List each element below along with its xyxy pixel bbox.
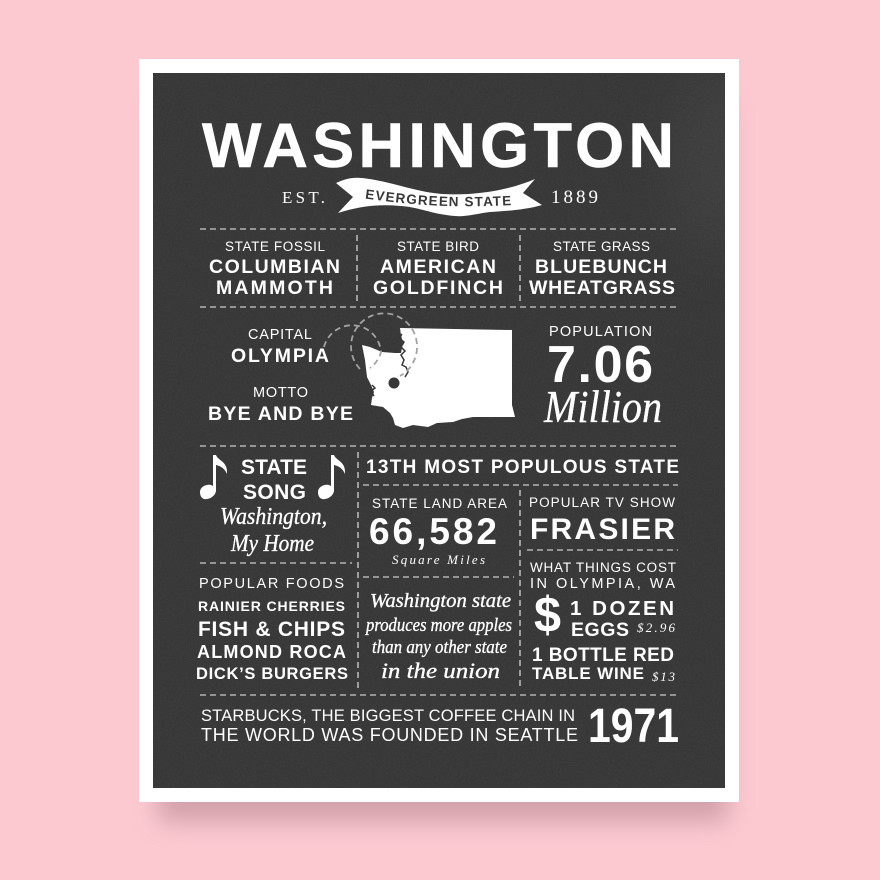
- panel: popular foods: FISH & CHIPS: [198, 618, 345, 641]
- panel: starbucks fact: STARBUCKS, THE BIGGEST COFFEE CHAIN IN: [201, 707, 575, 725]
- panel: starbucks fact: [201, 700, 679, 753]
- panel: state grass: [529, 239, 675, 299]
- price: wine: [532, 645, 676, 684]
- divider lines: [200, 229, 678, 695]
- panel: apples fact: than any other state: [372, 637, 507, 658]
- price: eggs: EGGS: [571, 619, 629, 641]
- price: wine: 1 BOTTLE RED: [532, 645, 674, 666]
- year: 1889: [551, 187, 598, 208]
- panel: state song: My Home: [230, 531, 314, 557]
- panel: capital: CAPITAL: [248, 327, 312, 343]
- panel: state grass: STATE GRASS: [553, 239, 650, 254]
- panel: population: 7.06: [547, 336, 653, 394]
- panel: popular foods: [196, 576, 348, 683]
- panel: state fossil: STATE FOSSIL: [225, 239, 325, 254]
- panel: state fossil: [209, 239, 340, 299]
- icon: dollar sign: $: [534, 587, 561, 643]
- established label: EST.: [282, 188, 325, 207]
- panel: tv show: [529, 495, 675, 546]
- ribbon banner: [336, 178, 542, 216]
- panel: population: POPULATION: [549, 324, 652, 340]
- price: wine: TABLE WINE: [532, 664, 644, 683]
- song name: Washington,: [220, 504, 327, 530]
- icon: music note right: [318, 455, 345, 499]
- panel: state fossil: MAMMOTH: [216, 277, 333, 299]
- panel: land area: 66,582: [369, 511, 497, 552]
- panel: state song: [200, 455, 345, 557]
- panel: motto: BYE AND BYE: [208, 403, 353, 425]
- state silhouette: [362, 328, 515, 428]
- panel: popular foods: ALMOND ROCA: [197, 642, 346, 662]
- panel: what things cost: WHAT THINGS COST: [530, 560, 676, 575]
- banner text: EVERGREEN STATE: [366, 189, 511, 206]
- panel: capital: OLYMPIA: [231, 345, 329, 367]
- panel: capital: [231, 327, 329, 367]
- panel: popular foods: DICK’S BURGERS: [196, 665, 348, 683]
- year 1971: 1971: [588, 700, 679, 753]
- price: wine: $13: [652, 669, 676, 684]
- panel: apples fact: produces more apples: [364, 615, 512, 636]
- panel: popular foods: POPULAR FOODS: [199, 576, 344, 592]
- panel: tv show: FRASIER: [530, 513, 675, 546]
- panel: apples fact: in the union: [381, 658, 500, 683]
- subtitle banner group: [282, 178, 598, 216]
- poster shadow: [158, 100, 728, 822]
- price: eggs: 1 DOZEN: [570, 597, 674, 620]
- panel: apples fact: Washington state: [370, 590, 511, 612]
- panel: state bird: [373, 239, 503, 299]
- panel: motto: MOTTO: [253, 385, 308, 401]
- capital marker: [388, 378, 400, 388]
- panel: land area: STATE LAND AREA: [372, 496, 507, 511]
- panel: motto: [208, 385, 353, 425]
- song heading: STATE: [241, 456, 307, 479]
- price: eggs: $2.96: [637, 620, 676, 635]
- panel: state grass: BLUEBUNCH: [535, 256, 667, 278]
- title: WASHINGTON: [202, 111, 674, 181]
- icon: music note left: [200, 455, 227, 499]
- panel: what things cost: [530, 560, 676, 684]
- panel: population: Million: [543, 381, 662, 432]
- panel: apples fact: [364, 590, 512, 683]
- poster frame: [139, 59, 739, 802]
- price: eggs: [570, 597, 676, 641]
- panel: state fossil: COLUMBIAN: [209, 256, 340, 278]
- puget sound inlets: [371, 334, 408, 396]
- panel: land area: [369, 496, 507, 567]
- panel: starbucks fact: THE WORLD WAS FOUNDED IN SEATTLE: [201, 725, 578, 745]
- panel: tv show: POPULAR TV SHOW: [529, 495, 675, 510]
- chalkboard panel: [153, 65, 750, 788]
- panel: state grass: WHEATGRASS: [529, 277, 675, 299]
- heading: most populous: 13TH MOST POPULOUS STATE: [366, 457, 679, 478]
- panel: population: [543, 324, 662, 432]
- panel: land area: Square Miles: [392, 552, 485, 567]
- map: Washington state with capital marker: [324, 313, 515, 428]
- panel: what things cost: IN OLYMPIA, WA: [530, 576, 675, 592]
- panel: state bird: STATE BIRD: [397, 239, 479, 254]
- panel: popular foods: RAINIER CHERRIES: [198, 598, 345, 614]
- panel: state song: SONG: [243, 481, 306, 504]
- panel: state bird: AMERICAN: [380, 256, 496, 278]
- panel: state bird: GOLDFINCH: [373, 277, 503, 299]
- dashed location circles: [324, 313, 417, 376]
